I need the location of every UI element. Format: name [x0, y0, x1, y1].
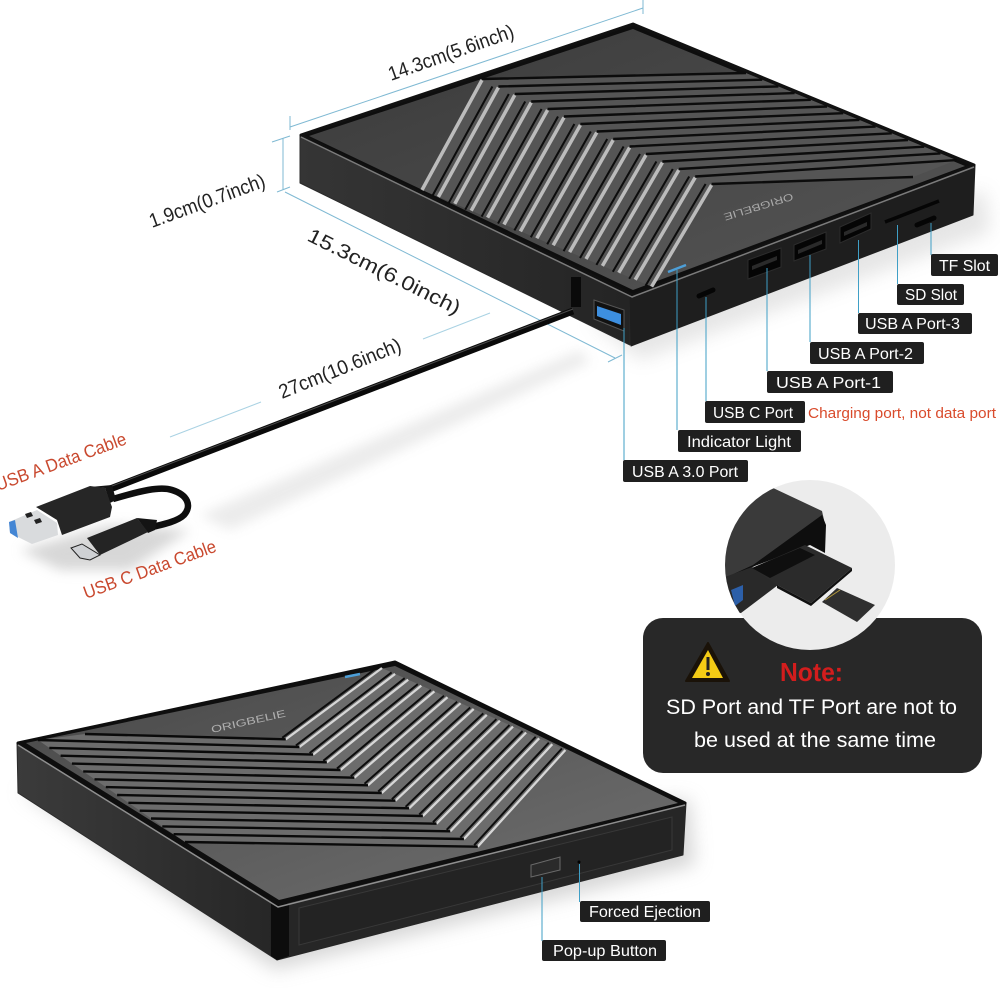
shadow: cable	[200, 350, 590, 530]
label: USB A Port-3: USB A Port-3	[865, 316, 960, 333]
dimension line: depth	[285, 192, 622, 362]
label: USB A Port-3	[858, 313, 972, 334]
label: USB A Port-1	[767, 371, 893, 393]
device rim highlight	[301, 137, 974, 297]
dimension label: height: 1.9cm(0.7inch)	[146, 170, 268, 233]
label: Indicator Light: Indicator Light	[687, 434, 792, 451]
port: USB A 3.0	[594, 300, 624, 331]
device left side	[300, 135, 630, 345]
note text line 1: SD Port and TF Port are not to	[666, 695, 957, 719]
shadow: top device	[590, 190, 990, 360]
label: Indicator Light	[678, 430, 801, 452]
device inset panel	[26, 666, 678, 900]
black chevron lines	[38, 734, 478, 847]
label: USB C Port: USB C Port	[713, 405, 794, 422]
device front side	[630, 165, 975, 346]
USB C loop cable	[113, 489, 188, 527]
label: USB C Port	[705, 401, 805, 423]
label: Forced Ejection: Forced Ejection	[589, 904, 701, 921]
device top face	[18, 662, 685, 904]
note text line 2: be used at the same time	[694, 728, 936, 752]
label: USB A Port-1: USB A Port-1	[776, 375, 881, 392]
note: charging port: Charging port, not data port	[808, 406, 996, 422]
SD slot	[885, 201, 939, 222]
device front side	[277, 803, 686, 960]
forced ejection hole	[578, 860, 580, 864]
label: Pop-up Button	[542, 940, 666, 961]
brand: ORIGBELIE	[210, 709, 287, 736]
label: Forced Ejection	[580, 901, 710, 922]
USB A connector	[9, 485, 116, 544]
port: USB A 3	[840, 213, 871, 243]
device inset panel	[309, 29, 965, 290]
cable highlight	[112, 309, 573, 486]
device corner	[271, 901, 289, 960]
dimension label: cable length: 27cm(10.6inch)	[276, 335, 404, 404]
note panel	[643, 618, 982, 773]
light stripes	[422, 80, 712, 287]
shadow: bottom device	[20, 790, 695, 970]
disc tray	[299, 817, 672, 945]
leader lines: top device	[624, 223, 931, 460]
close-up device and cards	[720, 487, 875, 622]
dimension line: width	[290, 0, 643, 130]
magnifier circle	[720, 480, 895, 650]
port: USB A 1	[748, 248, 781, 279]
dark stripe grooves	[282, 666, 562, 845]
device left side	[17, 743, 278, 960]
port: USB A 2	[794, 232, 826, 261]
label: Pop-up Button: Pop-up Button	[553, 943, 657, 960]
light stripes	[286, 668, 565, 847]
pop-up button	[531, 857, 560, 877]
device top face	[301, 24, 974, 295]
chevron band	[38, 668, 565, 847]
dimension line: cable length	[170, 313, 490, 437]
label: USB A Port-2	[810, 342, 924, 364]
cable	[110, 311, 573, 489]
note heading: Note:	[780, 657, 843, 687]
bottom device	[17, 662, 686, 960]
brand: ORIGBELIE	[722, 190, 794, 222]
chevron band	[422, 73, 957, 287]
label: SD Slot: SD Slot	[905, 287, 958, 304]
top device	[300, 24, 975, 346]
dark stripe grooves	[432, 86, 706, 286]
label: SD Slot	[897, 284, 964, 305]
device rim highlight	[18, 745, 685, 907]
label: USB A Port-2: USB A Port-2	[818, 346, 913, 363]
label: USB A 3.0 Port	[623, 460, 748, 482]
shadow: connectors	[20, 525, 190, 570]
cable label: USB C: USB C Data Cable	[81, 536, 219, 603]
port: USB C	[699, 290, 713, 296]
cable notch	[571, 277, 581, 307]
dimension line: height	[272, 136, 290, 192]
label: TF Slot: TF Slot	[939, 258, 991, 275]
indicator light	[668, 265, 686, 272]
leader lines: bottom device	[542, 864, 580, 941]
label: TF Slot	[931, 254, 998, 276]
warning icon	[686, 643, 729, 681]
USB C connector	[71, 518, 157, 560]
indicator light	[345, 674, 360, 677]
TF slot	[917, 218, 934, 225]
dimension label: depth: 15.3cm(6.0inch)	[304, 225, 464, 319]
black chevron lines	[482, 73, 957, 184]
dimension label: width: 14.3cm(5.6inch)	[385, 21, 517, 86]
label: USB A 3.0 Port: USB A 3.0 Port	[632, 464, 739, 481]
